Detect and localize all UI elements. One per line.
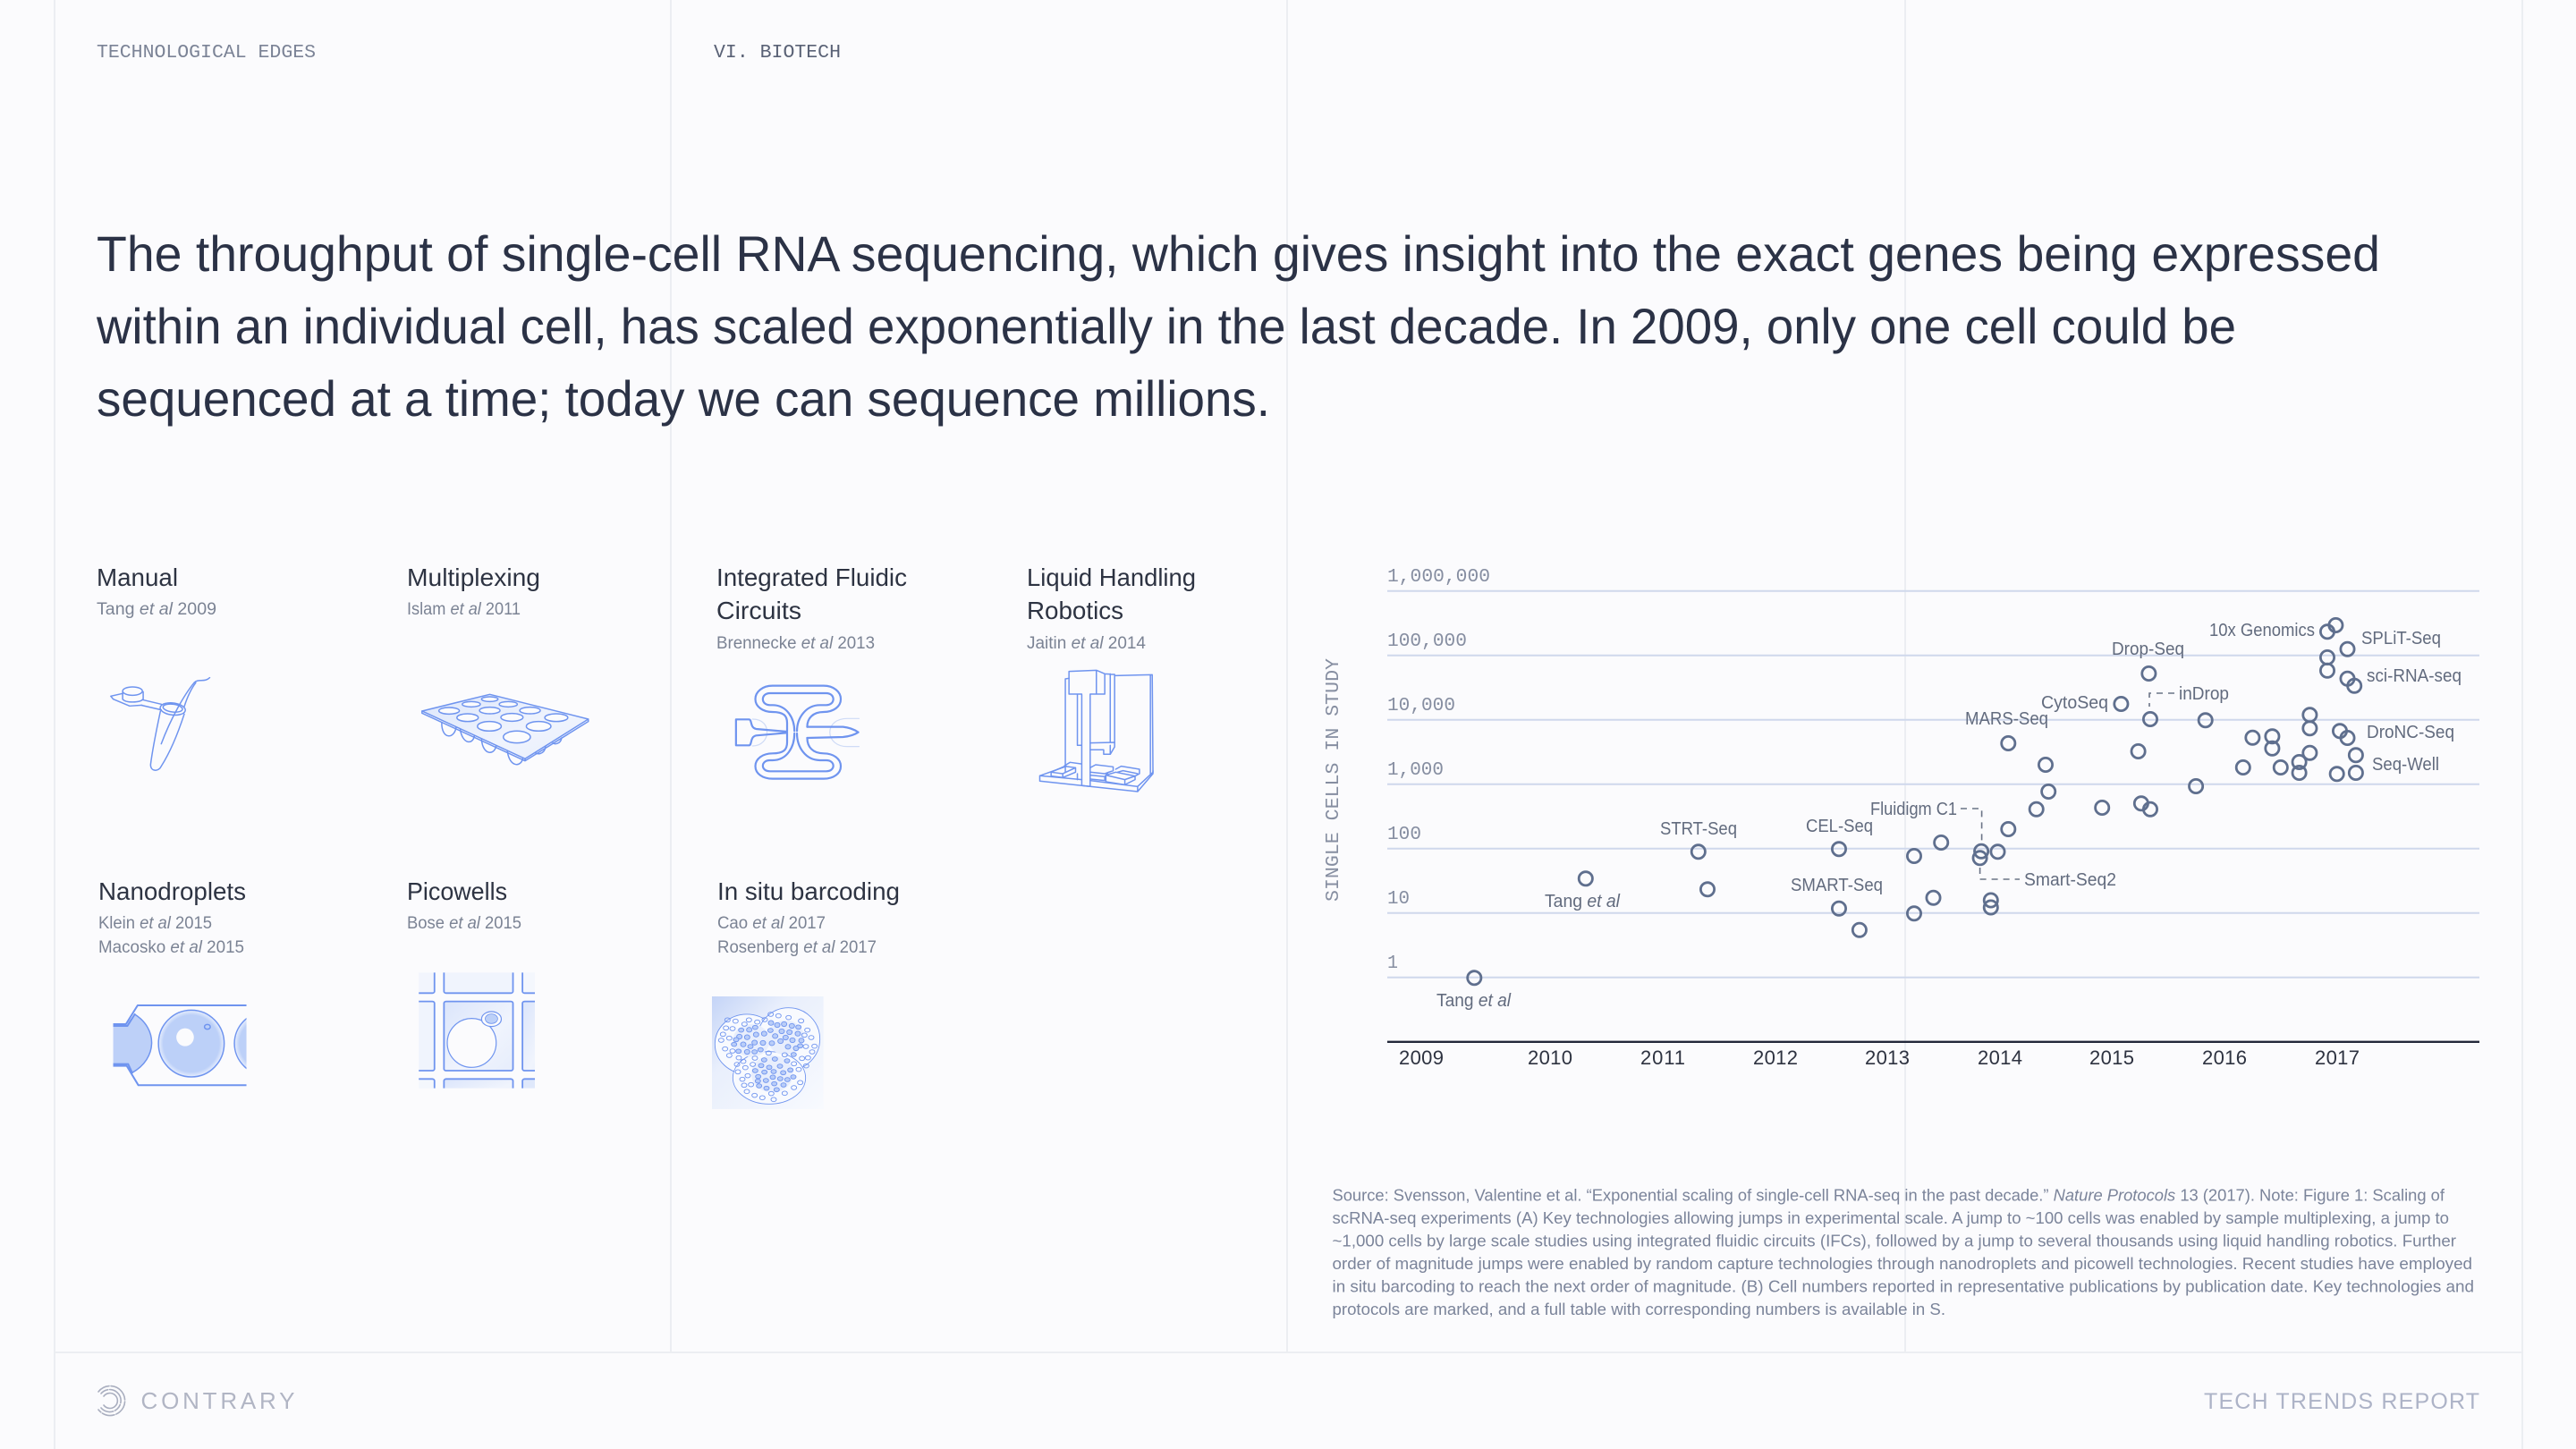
- icon: embryo cells: [712, 996, 824, 1109]
- x axis year labels: 2013: [1865, 1046, 1910, 1069]
- headline text: within an individual cell, has scaled exponentially in the last decade. In 2009, only one cell could be: [96, 298, 2236, 354]
- headline text: The throughput of single-cell RNA sequencing, which gives insight into the exact genes being expressed: [97, 225, 2380, 282]
- section label: VI. Biotech: VI. BIOTECH: [714, 42, 841, 64]
- panel: manual: [97, 564, 216, 770]
- panel: nanodroplets: Klein et al 2015: [98, 914, 212, 933]
- point labels: Smart-Seq2: [2024, 870, 2116, 890]
- data points: [1468, 618, 2362, 985]
- point labels: inDrop: [2179, 684, 2229, 704]
- footer label: Tech Trends Report: TECH TRENDS REPORT: [2204, 1389, 2479, 1414]
- point labels: Fluidigm C1: [1870, 800, 1957, 819]
- panel: in situ barcoding: [712, 877, 900, 1109]
- x axis year labels: 2011: [1640, 1046, 1685, 1069]
- x axis year labels: 2017: [2315, 1046, 2360, 1069]
- point labels: Tang et al: [1436, 991, 1512, 1011]
- panel: integrated fluidic circuits: [716, 564, 907, 779]
- x axis year labels: 2016: [2202, 1046, 2247, 1069]
- y axis tick labels: 1,000: [1387, 759, 1444, 781]
- logo: Contrary: CONTRARY: [141, 1387, 295, 1414]
- icon: robot: [1039, 670, 1153, 792]
- x axis year labels: 2015: [2089, 1046, 2134, 1069]
- panel: nanodroplets: [100, 882, 247, 1086]
- icon: microcentrifuge tube and pipette: [111, 678, 209, 770]
- panel: in situ barcoding: In situ barcoding: [717, 877, 900, 905]
- y axis tick labels: [1387, 566, 1490, 974]
- point labels: STRT-Seq: [1660, 819, 1737, 839]
- panel: manual: Manual: [97, 564, 178, 591]
- panel: integrated fluidic circuits: Integrated Fluidic: [716, 564, 907, 591]
- x axis year labels: 2010: [1528, 1046, 1572, 1069]
- source note: [1333, 1186, 2474, 1318]
- source note: scRNA-seq experiments (A) Key technologies allowing jumps in experimental scale. A jump to ~100 cells was enabled by sample multiplexing, a jump to: [1333, 1208, 2449, 1227]
- point labels: DroNC-Seq: [2367, 723, 2454, 742]
- panel: nanodroplets: Macosko et al 2015: [98, 938, 244, 957]
- point labels: SPLiT-Seq: [2361, 629, 2441, 648]
- y axis title: SINGLE CELLS IN STUDY: [1323, 658, 1344, 902]
- section label: Technological Edges: TECHNOLOGICAL EDGES: [97, 42, 316, 64]
- point labels: SMART-Seq: [1791, 876, 1883, 895]
- panel: liquid handling robotics: Jaitin et al 2014: [1027, 634, 1146, 653]
- panel: picowells: Picowells: [407, 877, 507, 905]
- panel: multiplexing: Islam et al 2011: [407, 600, 521, 619]
- icon: well plate: [422, 694, 589, 765]
- panel: multiplexing: [407, 564, 589, 765]
- panel: picowells: [408, 882, 535, 1089]
- x axis year labels: [1399, 1046, 2360, 1069]
- y axis tick labels: 1: [1387, 953, 1398, 974]
- panel: liquid handling robotics: Liquid Handling: [1027, 564, 1196, 591]
- source note: ~1,000 cells by large scale studies using integrated fluidic circuits (IFCs), followed by a jump to several thousands using liquid handling robotics. Further: [1333, 1231, 2456, 1250]
- source note: order of magnitude jumps were enabled by random capture technologies through nanodroplets and picowell technologies. Recent studies have employed: [1333, 1254, 2472, 1273]
- icon: picowell grid: [419, 972, 535, 1089]
- x axis line: [1387, 1041, 2479, 1043]
- point labels: CEL-Seq: [1806, 817, 1873, 836]
- source note: protocols are marked, and a full table with corresponding numbers is available in S.: [1333, 1300, 1945, 1318]
- panel: picowells: Bose et al 2015: [407, 914, 521, 933]
- x axis year labels: 2009: [1399, 1046, 1444, 1069]
- source note: in situ barcoding to reach the next order of magnitude. (B) Cell numbers reported in representative publications by publication date. Key technologies and: [1333, 1277, 2474, 1295]
- headline text: sequenced at a time; today we can sequence millions.: [97, 370, 1270, 427]
- chart: single cells in study over time: [1323, 566, 2479, 1069]
- x axis year labels: 2012: [1753, 1046, 1798, 1069]
- y axis tick labels: 1,000,000: [1387, 566, 1490, 588]
- y axis tick labels: 10: [1387, 888, 1410, 910]
- leader lines: [1961, 693, 2174, 879]
- point labels: CytoSeq: [2041, 693, 2108, 713]
- y axis tick labels: 100: [1387, 824, 1421, 845]
- logo mark: [98, 1386, 125, 1416]
- y axis tick labels: 100,000: [1387, 631, 1467, 652]
- x axis year labels: 2014: [1978, 1046, 2022, 1069]
- panel: in situ barcoding: Cao et al 2017: [717, 914, 826, 933]
- point labels: MARS-Seq: [1965, 709, 2048, 729]
- source note: Source: Svensson, Valentine et al. “Exponential scaling of single-cell RNA-seq in the past decade.” Nature Protocols 13 (2017). Note: Figure 1: Scaling of: [1333, 1186, 2445, 1204]
- point labels: [1436, 621, 2462, 1011]
- point labels: Seq-Well: [2372, 755, 2439, 775]
- point labels: 10x Genomics: [2209, 621, 2315, 640]
- headline text: [96, 225, 2380, 427]
- point labels: Tang et al: [1545, 892, 1621, 911]
- panel: manual: Tang et al 2009: [97, 600, 216, 619]
- point labels: Drop-Seq: [2112, 640, 2184, 659]
- icon: fluidic circuit: [736, 686, 859, 779]
- panel: integrated fluidic circuits: Circuits: [716, 597, 801, 624]
- panel: multiplexing: Multiplexing: [407, 564, 540, 591]
- panel: liquid handling robotics: Robotics: [1027, 597, 1123, 624]
- icon: droplets in channel: [113, 1004, 247, 1086]
- panel: liquid handling robotics: [1027, 564, 1196, 792]
- panel: nanodroplets: Nanodroplets: [98, 877, 246, 905]
- panel: in situ barcoding: Rosenberg et al 2017: [717, 938, 877, 957]
- point labels: sci-RNA-seq: [2367, 666, 2462, 686]
- panel: integrated fluidic circuits: Brennecke et al 2013: [716, 634, 875, 653]
- y axis tick labels: 10,000: [1387, 695, 1455, 716]
